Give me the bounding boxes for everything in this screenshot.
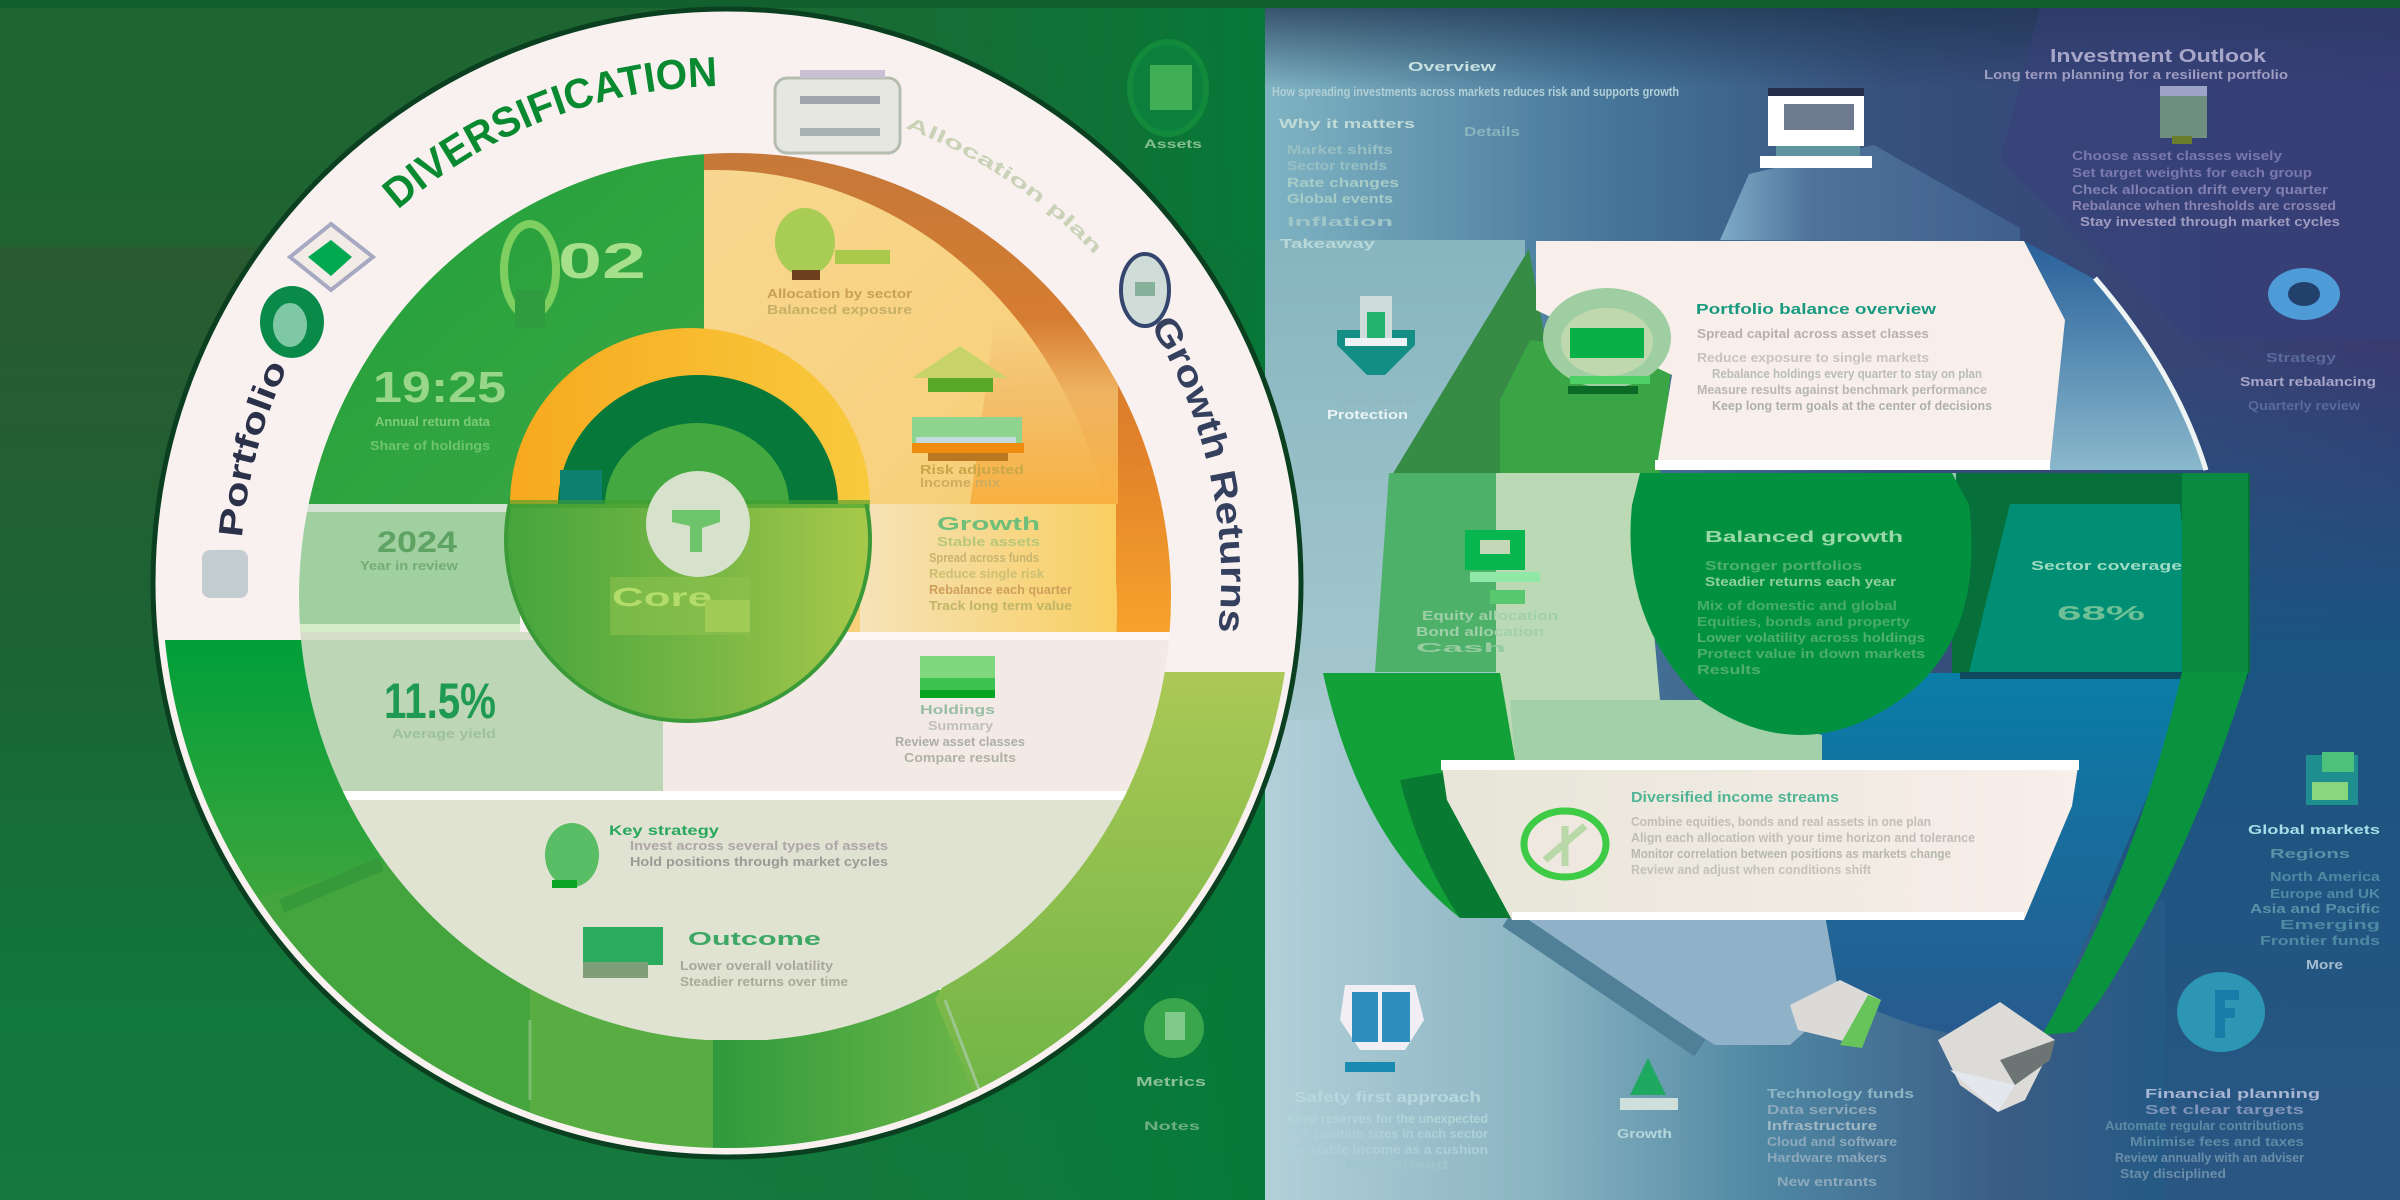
text block: green disc: Equities, bonds and property [1697, 614, 1911, 629]
text block: 2024 band [360, 526, 459, 573]
shape: green column [1375, 473, 1496, 672]
icon: ring right badge [1121, 254, 1169, 326]
icon: cube two [1938, 1002, 2055, 1112]
text block: right middle: Quarterly review [2248, 398, 2361, 413]
text block: bottom left: Limit position sizes in each sector [1280, 1126, 1488, 1141]
text block: top left: How spreading investments across markets reduces risk and supports growth [1272, 84, 1679, 99]
text block: right list [2072, 148, 2340, 229]
text block: yellow band [929, 514, 1072, 613]
text block: stat upper left: Annual return data [375, 414, 491, 429]
icon: teal circle [2177, 972, 2265, 1052]
icon: laptop [1760, 88, 1872, 168]
text block: right list: Set target weights for each group [2072, 165, 2312, 180]
icon: bottom right of left field: Metrics [1136, 1074, 1206, 1089]
text block: top left: Details [1464, 124, 1520, 139]
text block: green disc: Lower volatility across holdings [1697, 630, 1925, 645]
text lines: upper card [1696, 301, 1992, 413]
shape: green disc [1630, 473, 1972, 735]
shape: pale wedge under panel [1512, 915, 1840, 1045]
icon: green badge [1543, 288, 1671, 394]
text block: right lower: Frontier funds [2260, 933, 2380, 948]
icon: top right of left field [1130, 42, 1206, 151]
text block: right lower: Europe and UK [2270, 886, 2381, 901]
text block: bottom right: Automate regular contributions [2105, 1118, 2304, 1133]
text block: right lower [2248, 822, 2381, 972]
text block: top left: Why it matters [1279, 116, 1415, 131]
text block: bottom left: Use stable income as a cushion [1280, 1142, 1488, 1157]
panel: bottom pale [342, 791, 1127, 1040]
text block: green disc: Balanced growth [1705, 529, 1903, 546]
text block: 02 tile [504, 224, 646, 328]
icon: right green badge [2306, 752, 2358, 805]
donut chart: left circular infographic [150, 6, 1304, 1160]
text block: green disc: Mix of domestic and global [1697, 598, 1897, 613]
inner quadrants [280, 140, 1184, 1050]
text block: green column: Equity allocation [1422, 608, 1558, 623]
text lines: yellow quadrant top: Allocation by sector [767, 286, 912, 301]
label: ring right dark text: Growth Returns [1155, 318, 1242, 631]
text lines: lower card: Monitor correlation between positions as markets change [1631, 846, 1951, 861]
text block: bottom panel row two: Steadier returns over time [680, 974, 848, 989]
text block: small bottom label: Growth [1617, 1126, 1672, 1141]
icon: tree in yellow quadrant [775, 208, 890, 280]
diagram: right overlapping shapes [1323, 145, 2250, 1048]
icon: center badge [646, 471, 750, 577]
text lines: below card: Risk adjusted [920, 462, 1024, 477]
text block: lower right panel: Summary [928, 718, 994, 733]
text block: right lower: Regions [2270, 846, 2350, 861]
text block: right middle: Smart rebalancing [2240, 374, 2376, 389]
text block: top right [1984, 46, 2288, 82]
text block: teal panel: Sector coverage [2031, 558, 2182, 573]
text block: top left: Global events [1287, 191, 1393, 206]
center label [610, 577, 750, 635]
text block: yellow band: Reduce single risk [929, 566, 1045, 581]
shape: right wedge [2024, 241, 2208, 470]
text block: bottom middle: Technology funds [1767, 1086, 1914, 1101]
shape: pale center column [1496, 473, 1822, 760]
icon: ring shield [260, 286, 324, 358]
text block: bottom left: Plan ahead [1345, 1157, 1448, 1172]
text block: 02 tile: 02 [558, 233, 646, 289]
shape: blue lower area [1810, 673, 2200, 1038]
icon: ring lower left seal [202, 550, 248, 598]
text block: top right: Long term planning for a resilient portfolio [1984, 67, 2288, 82]
band: pale green [280, 504, 520, 632]
text block: bottom middle [1767, 1086, 1914, 1189]
text block: right middle: Strategy [2266, 350, 2337, 365]
text block: 11.5% panel: 11.5% [384, 673, 496, 729]
text block: right middle [2240, 350, 2376, 413]
text block: green disc: Steadier returns each year [1705, 574, 1896, 589]
text block: yellow band: Growth [937, 514, 1040, 534]
text block: right lower: Emerging [2280, 917, 2380, 932]
panel: white lower card [1441, 760, 2079, 920]
outer white ring [153, 9, 1301, 1157]
text block: yellow band: Spread across funds [929, 550, 1039, 565]
text block: right lower: Asia and Pacific [2250, 901, 2380, 916]
shape: green wedge dark [1389, 249, 1570, 480]
panel: white upper card [1536, 241, 2065, 465]
text block: lower right panel: Holdings [920, 702, 995, 717]
quadrant: upper right yellow with orange rim [704, 153, 1171, 639]
text lines: upper card: Measure results against benchmark performance [1697, 382, 1987, 397]
background: right blue field [1265, 8, 2400, 1200]
text block: bottom left [1280, 1089, 1488, 1172]
text block: bottom middle: Cloud and software [1767, 1134, 1897, 1149]
text block: top left: Overview [1408, 59, 1497, 74]
shape: green wedge bright [1500, 340, 1672, 475]
text block: teal panel: 68% [2057, 603, 2145, 625]
text lines: below card [920, 462, 1024, 490]
text block: top left: Market shifts [1287, 142, 1393, 157]
text block: bottom left: Safety first approach [1294, 1089, 1481, 1106]
icon: green ring [1524, 811, 1606, 877]
text block: green disc [1697, 529, 1925, 677]
icon: bottom right of left field: Notes [1144, 1119, 1201, 1133]
text block: right list: Check allocation drift every quarter [2072, 182, 2328, 197]
text block: lower right panel: Compare results [904, 750, 1016, 765]
text lines: upper card: Portfolio balance overview [1696, 301, 1936, 318]
icon: bottom right of left field [1136, 998, 1206, 1133]
panel: lower left pale green [280, 632, 663, 791]
text block: 2024 band: Year in review [360, 558, 459, 573]
text block: top left: Takeaway [1280, 236, 1376, 251]
text block: bottom right: Stay disciplined [2120, 1166, 2226, 1181]
shape: right green stripe [2042, 672, 2248, 1035]
label: ring left dark text: Portfolio [218, 364, 284, 536]
text lines: upper card: Keep long term goals at the center of decisions [1712, 398, 1992, 413]
text block: yellow band: Rebalance each quarter [929, 582, 1072, 597]
text block: bottom middle: Hardware makers [1767, 1150, 1887, 1165]
icon: teal shield [1337, 296, 1415, 375]
text block: right list: Rebalance when thresholds are crossed [2072, 198, 2336, 213]
text lines: upper card: Rebalance holdings every quarter to stay on plan [1712, 366, 1982, 381]
text block: bottom left: Keep reserves for the unexpected [1287, 1111, 1488, 1126]
panel: lower right cream [663, 632, 1173, 791]
icon: top right tag [2160, 86, 2207, 144]
text block: green disc: Results [1697, 662, 1761, 677]
text block: right list: Choose asset classes wisely [2072, 148, 2283, 163]
text block: bottom panel row one [545, 822, 888, 888]
text block: top right: Investment Outlook [2050, 46, 2267, 66]
text block: bottom middle: Infrastructure [1767, 1118, 1877, 1133]
text block: lower right panel: Review asset classes [895, 734, 1025, 749]
text lines: lower card: Review and adjust when conditions shift [1631, 862, 1872, 877]
label: ring upper right pale text: Allocation plan [906, 120, 1098, 254]
text block: 2024 band: 2024 [377, 526, 457, 559]
text block: top left: Inflation [1287, 214, 1393, 229]
text block: stat upper left: 19:25 [373, 363, 506, 412]
text block: bottom panel row two: Outcome [688, 929, 821, 949]
icon: green square with text [1465, 530, 1540, 604]
text lines: lower card: Diversified income streams [1631, 789, 1839, 806]
text block: bottom panel row one: Key strategy [609, 822, 719, 838]
text block: stat upper left: Share of holdings [370, 438, 490, 453]
shape: blue fan [1720, 145, 2020, 242]
icon: green card [912, 417, 1024, 461]
text block: bottom panel row one: Hold positions through market cycles [630, 854, 888, 869]
text lines: lower card [1631, 789, 1975, 877]
text block: bottom panel row two [583, 927, 848, 989]
text block: green column: Bond allocation [1416, 624, 1544, 639]
text block: green column [1416, 608, 1558, 655]
icon: blue gear [2268, 268, 2340, 320]
text block: left middle: Safeguard [1337, 392, 1415, 407]
text block: top left: Sector trends [1287, 158, 1387, 173]
shape: dark divider [1960, 672, 2248, 679]
text lines: lower card: Align each allocation with your time horizon and tolerance [1631, 830, 1975, 845]
text lines: upper card: Reduce exposure to single markets [1697, 350, 1929, 365]
center label: Core [612, 582, 712, 612]
center disc and arches [506, 328, 870, 721]
text block: yellow band: Stable assets [937, 534, 1040, 549]
text block: right lower: North America [2270, 869, 2381, 884]
text lines: upper card: Spread capital across asset classes [1697, 326, 1929, 341]
text block: bottom right [2105, 1086, 2320, 1181]
icon: blue shield [1340, 985, 1424, 1072]
text block: green column: Cash [1416, 640, 1506, 655]
heading: curved ring title: DIVERSIFICATION [381, 57, 715, 208]
text block: green disc: Protect value in down markets [1697, 646, 1925, 661]
text block: bottom right: Minimise fees and taxes [2130, 1134, 2304, 1149]
icon: top ring card [775, 70, 900, 153]
text block: left middle [1327, 392, 1415, 422]
icon: cube one [1790, 980, 1881, 1048]
shape: dark teal panel [1866, 473, 2250, 673]
text block: stat upper left [370, 363, 506, 453]
icon: small green drop [1620, 1058, 1678, 1110]
text block: top left [1272, 59, 1679, 251]
text block: right list: Stay invested through market cycles [2080, 214, 2340, 229]
text lines: lower card: Combine equities, bonds and real assets in one plan [1631, 814, 1931, 829]
text block: right lower: More [2306, 957, 2343, 972]
text block: bottom panel row two: Lower overall volatility [680, 958, 834, 973]
text block: right lower: Global markets [2248, 822, 2380, 837]
icon: house [912, 346, 1007, 392]
text block: left middle: Protection [1327, 407, 1408, 422]
text block: lower right panel [895, 656, 1025, 765]
text block: bottom right: Set clear targets [2145, 1102, 2304, 1117]
band: pale yellow [860, 504, 1116, 632]
text block: bottom middle: Data services [1767, 1102, 1877, 1117]
text block: green disc: Stronger portfolios [1705, 558, 1862, 573]
text block: bottom panel row one: Invest across several types of assets [630, 838, 888, 853]
text block: 11.5% panel [384, 673, 496, 741]
lower ring segments [164, 640, 1285, 1148]
quadrant: upper left green [308, 154, 704, 504]
text block: bottom right: Review annually with an adviser [2115, 1150, 2304, 1165]
text lines: yellow quadrant top [767, 286, 912, 317]
text block: yellow band: Track long term value [929, 598, 1072, 613]
text block: bottom right: Financial planning [2145, 1086, 2320, 1101]
text lines: below card: Income mix [920, 475, 1001, 490]
text block: bottom middle: New entrants [1777, 1174, 1877, 1189]
text block: 11.5% panel: Average yield [392, 726, 496, 741]
shape: left green sweep [1323, 673, 1515, 918]
text block: teal panel [2031, 558, 2182, 625]
text lines: yellow quadrant top: Balanced exposure [767, 302, 912, 317]
icon: ring diamond [290, 224, 373, 290]
text block: top left: Rate changes [1287, 175, 1399, 190]
icon: top right of left field: Assets [1144, 137, 1202, 151]
